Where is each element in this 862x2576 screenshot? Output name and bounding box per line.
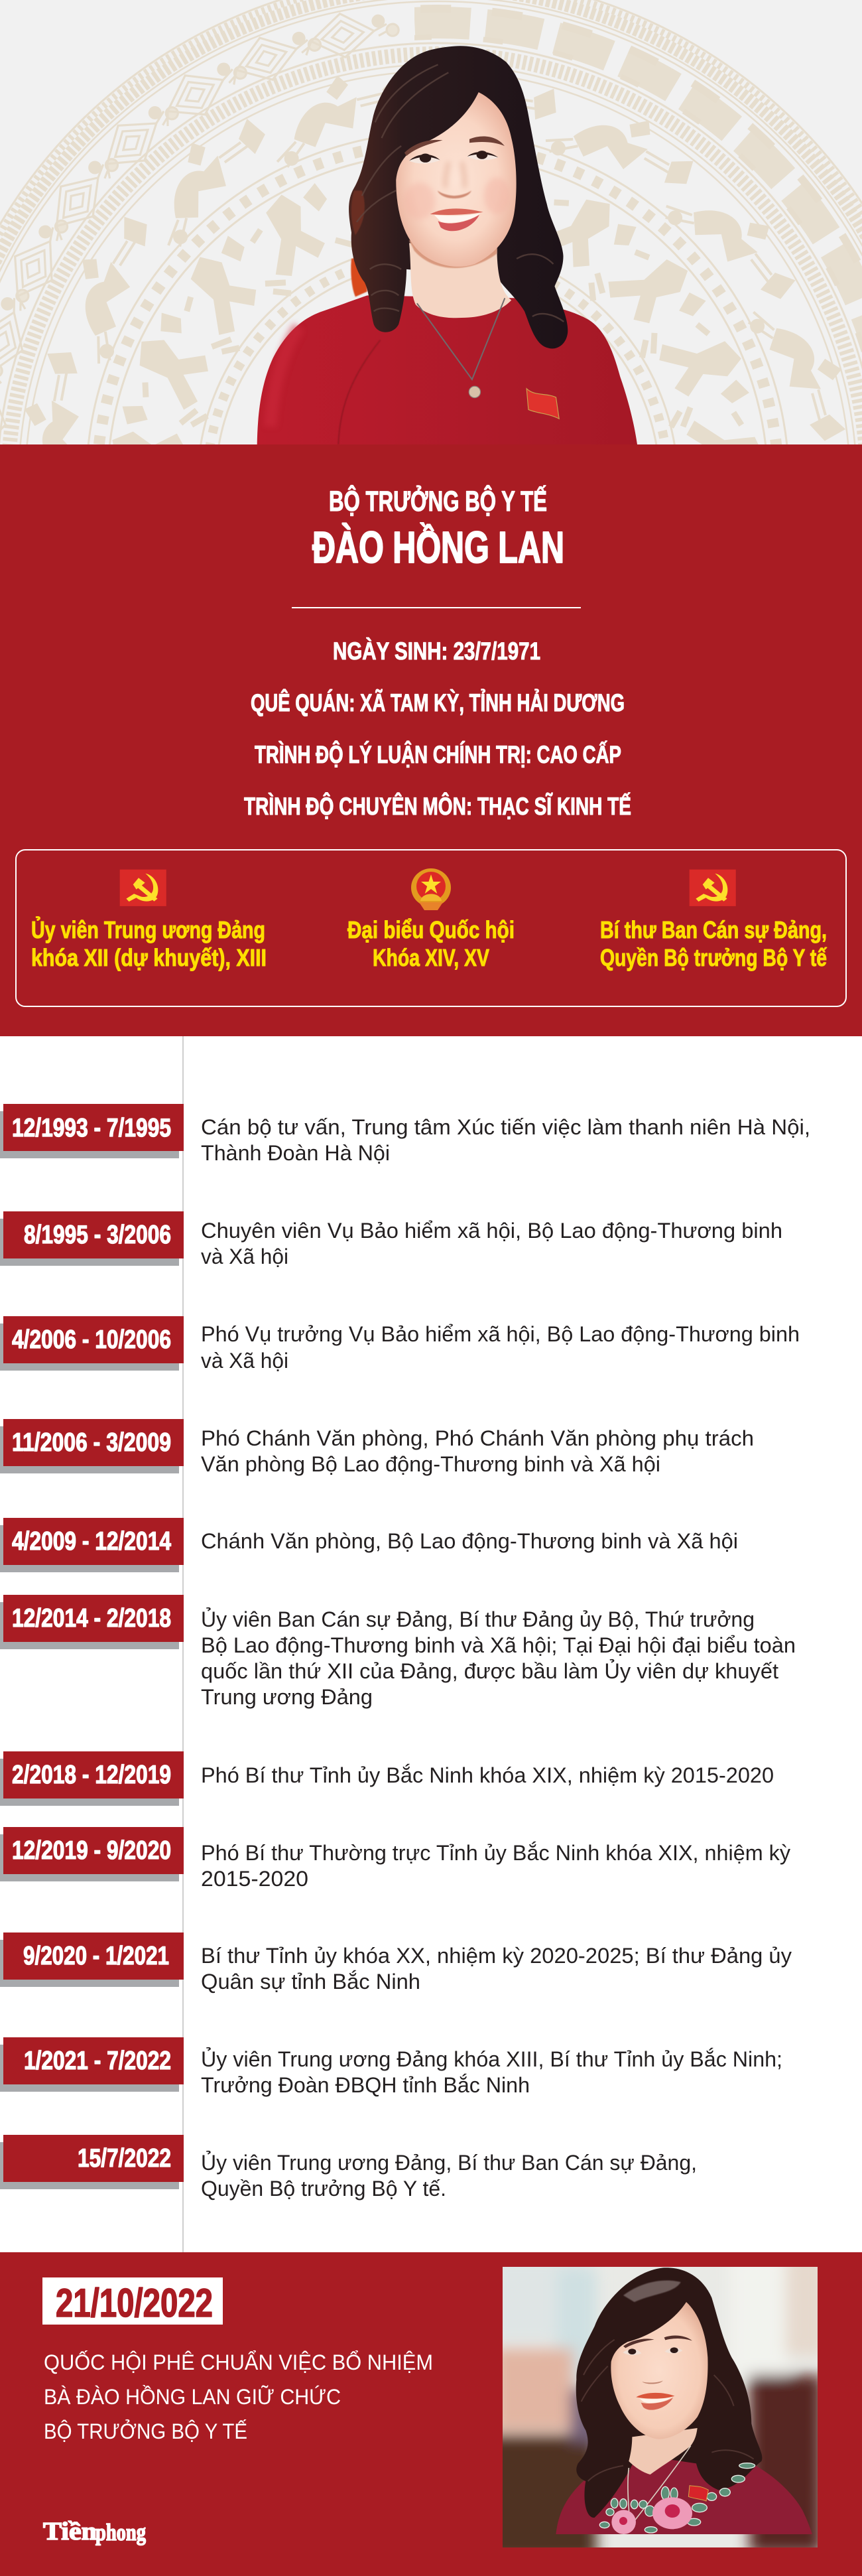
row: 4/2009 - 12/2014: Chánh Văn phòng, Bộ Lao động-Thương binh và Xã hội [201, 1529, 738, 1553]
professional level: TRÌNH ĐỘ CHUYÊN MÔN: THẠC SĨ KINH TẾ [244, 792, 631, 820]
subtitle: BỘ TRƯỞNG BỘ Y TẾ [329, 485, 547, 517]
row: 12/2014 - 2/2018 [0, 1595, 796, 1709]
role: national assembly deputy: Khóa XIV, XV [373, 944, 489, 971]
brows and eyes [469, 137, 505, 146]
birth date: NGÀY SINH: 23/7/1971 [333, 638, 540, 665]
role: central committee [31, 915, 267, 971]
panel: career timeline [0, 1036, 810, 2252]
flag badge [526, 389, 559, 419]
row: 12/2014 - 2/2018: quốc lần thứ XII của Đảng, được bầu làm Ủy viên dự khuyết [201, 1659, 778, 1683]
orange hair edge [351, 256, 367, 297]
row: 15/7/2022: 15/7/2022 [78, 2144, 171, 2173]
neck [629, 2428, 698, 2474]
row: 1/2021 - 7/2022: Trưởng Đoàn ĐBQH tỉnh Bắc Ninh [201, 2073, 530, 2097]
row: 9/2020 - 1/2021: 9/2020 - 1/2021 [23, 1942, 169, 1970]
hair [349, 46, 568, 348]
row: 11/2006 - 3/2009: Phó Chánh Văn phòng, Phó Chánh Văn phòng phụ trách [201, 1426, 754, 1450]
row: 12/1993 - 7/1995: Cán bộ tư vấn, Trung tâm Xúc tiến việc làm thanh niên Hà Nội, [201, 1115, 810, 1139]
necklace [628, 2446, 691, 2526]
row: 12/2014 - 2/2018: Ủy viên Ban Cán sự Đảng, Bí thư Đảng ủy Bộ, Thứ trưởng [201, 1607, 755, 1631]
name: ĐÀO HỒNG LAN [312, 523, 564, 573]
row: 12/1993 - 7/1995: 12/1993 - 7/1995 [12, 1114, 171, 1142]
appointment text: BỘ TRƯỞNG BỘ Y TẾ [44, 2419, 247, 2443]
logo: Tiền Phong: Tiền [43, 2518, 97, 2545]
row: 9/2020 - 1/2021: Bí thư Tỉnh ủy khóa XX, nhiệm kỳ 2020-2025; Bí thư Đảng ủy [201, 1944, 792, 1968]
row: 11/2006 - 3/2009: 11/2006 - 3/2009 [12, 1428, 171, 1457]
cheek blush [407, 183, 435, 219]
home town: QUÊ QUÁN: XÃ TAM KỲ, TỈNH HẢI DƯƠNG [251, 689, 625, 716]
political theory level: TRÌNH ĐỘ LÝ LUẬN CHÍNH TRỊ: CAO CẤP [255, 740, 621, 768]
role: national assembly deputy: Đại biểu Quốc hội [347, 916, 515, 943]
row: 4/2006 - 10/2006 [0, 1316, 800, 1373]
row: 15/7/2022 [0, 2135, 697, 2201]
row: 12/2019 - 9/2020: 2015-2020 [201, 1867, 308, 1891]
rule [292, 607, 581, 608]
drum diamonds [0, 12, 845, 444]
row: 1/2021 - 7/2022: Ủy viên Trung ương Đảng khóa XIII, Bí thư Tỉnh ủy Bắc Ninh; [201, 2047, 782, 2071]
bronze drum pattern [0, 0, 862, 444]
row: 4/2009 - 12/2014: 4/2009 - 12/2014 [12, 1527, 171, 1556]
timeline axis [182, 1036, 184, 2252]
shirt [257, 295, 637, 444]
date box: 21/10/2022 [56, 2281, 213, 2325]
neck [409, 243, 511, 318]
row: 4/2006 - 10/2006: 4/2006 - 10/2006 [12, 1325, 171, 1354]
hair [576, 2268, 762, 2518]
icon: party flag left [120, 870, 166, 906]
footer background [0, 2252, 862, 2576]
row: 4/2009 - 12/2014 [0, 1518, 738, 1572]
panel: hero portrait area [0, 0, 862, 444]
mouth [430, 208, 483, 215]
role: party secretary and minister [600, 916, 828, 971]
row: 12/2014 - 2/2018: Trung ương Đảng [201, 1685, 373, 1709]
appointment text [44, 2350, 433, 2443]
main portrait [257, 46, 637, 444]
appointment text: QUỐC HỘI PHÊ CHUẨN VIỆC BỔ NHIỆM [44, 2350, 433, 2374]
logo: Tiền Phong: phong [95, 2519, 146, 2545]
row: 8/1995 - 3/2006: Chuyên viên Vụ Bảo hiểm xã hội, Bộ Lao động-Thương binh [201, 1219, 782, 1243]
row: 12/2019 - 9/2020 [0, 1827, 790, 1891]
appointment text: BÀ ĐÀO HỒNG LAN GIỮ CHỨC [44, 2385, 341, 2409]
row: 4/2006 - 10/2006: Phó Vụ trưởng Vụ Bảo hiểm xã hội, Bộ Lao động-Thương binh [201, 1322, 800, 1346]
panel: footer appointment [0, 2252, 862, 2576]
row: 11/2006 - 3/2009 [0, 1419, 754, 1476]
necklace [417, 298, 505, 379]
logo: Tiền Phong [43, 2518, 146, 2545]
icon: national emblem [411, 868, 451, 910]
row: 1/2021 - 7/2022 [0, 2037, 782, 2097]
row: 2/2018 - 12/2019: 2/2018 - 12/2019 [12, 1761, 171, 1789]
row: 12/2014 - 2/2018: 12/2014 - 2/2018 [12, 1604, 171, 1633]
row: 9/2020 - 1/2021 [0, 1932, 792, 1994]
photo background [503, 2267, 818, 2547]
role: central committee: Ủy viên Trung ương Đảng [31, 915, 265, 943]
row: 8/1995 - 3/2006: 8/1995 - 3/2006 [24, 1221, 171, 1249]
nose [438, 190, 471, 198]
face [611, 2302, 708, 2439]
row: 12/1993 - 7/1995: Thành Đoàn Hà Nội [201, 1141, 390, 1165]
row: 12/2019 - 9/2020: Phó Bí thư Thường trực Tỉnh ủy Bắc Ninh khóa XIX, nhiệm kỳ [201, 1841, 790, 1865]
row: 8/1995 - 3/2006 [0, 1211, 782, 1268]
photo subject [556, 2268, 812, 2534]
row: 12/1993 - 7/1995 [0, 1104, 810, 1165]
role: national assembly deputy [347, 916, 515, 971]
role: central committee: khóa XII (dự khuyết), XIII [31, 944, 267, 971]
row: 12/2019 - 9/2020: 12/2019 - 9/2020 [12, 1836, 171, 1865]
row: 4/2006 - 10/2006: và Xã hội [201, 1349, 288, 1373]
row: 2/2018 - 12/2019: Phó Bí thư Tỉnh ủy Bắc Ninh khóa XIX, nhiệm kỳ 2015-2020 [201, 1763, 774, 1787]
row: 11/2006 - 3/2009: Văn phòng Bộ Lao động-Thương binh và Xã hội [201, 1452, 660, 1476]
icon: party flag right [690, 870, 736, 906]
row: 8/1995 - 3/2006: và Xã hội [201, 1245, 288, 1268]
face [396, 92, 517, 267]
hero background [0, 0, 862, 444]
dress [556, 2460, 812, 2534]
panel: red profile header [0, 444, 862, 1036]
row: 1/2021 - 7/2022: 1/2021 - 7/2022 [24, 2047, 171, 2075]
row: 15/7/2022: Ủy viên Trung ương Đảng, Bí thư Ban Cán sự Đảng, [201, 2151, 697, 2175]
row: 15/7/2022: Quyền Bộ trưởng Bộ Y tế. [201, 2177, 446, 2201]
row: 9/2020 - 1/2021: Quân sự tỉnh Bắc Ninh [201, 1970, 420, 1994]
roles box [16, 850, 846, 1006]
row: 12/2014 - 2/2018: Bộ Lao động-Thương binh và Xã hội; Tại Đại hội đại biểu toàn [201, 1633, 796, 1657]
brows, eyes, mouth [623, 2336, 692, 2348]
photo portrait [503, 2267, 818, 2547]
embroidered flowers [599, 2463, 755, 2534]
red background [0, 444, 862, 1036]
row: 2/2018 - 12/2019 [0, 1751, 774, 1806]
